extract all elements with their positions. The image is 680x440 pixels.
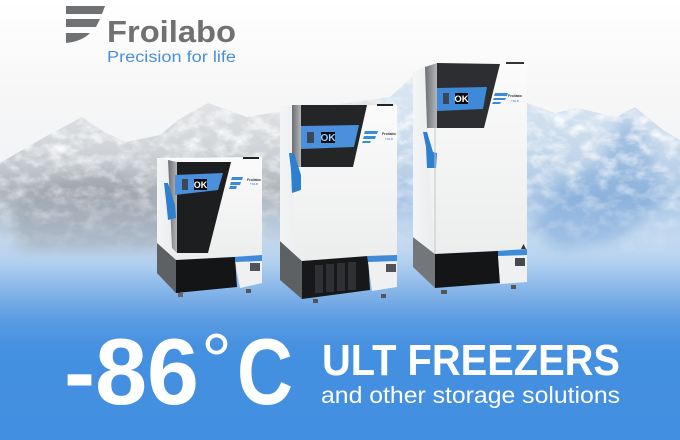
product subheading: and other storage solutions xyxy=(321,382,620,408)
freezer: small model: TMLB xyxy=(250,182,258,186)
temperature headline: -86 xyxy=(64,319,199,424)
logo: Froilabo xyxy=(66,6,236,66)
temperature headline xyxy=(64,318,293,424)
freezer: large model: OK xyxy=(454,94,469,105)
freezer: medium model: Froilabo xyxy=(382,132,396,136)
product heading: ULT FREEZERS xyxy=(322,336,620,385)
freezer: small model: Froilabo xyxy=(247,178,261,182)
freezer: small model xyxy=(157,157,262,297)
temperature headline: C xyxy=(237,319,293,424)
icon: logo stripes xyxy=(66,6,105,43)
freezer: medium model xyxy=(280,104,397,303)
freezer: large model: Froilabo xyxy=(508,94,522,98)
freezer: large model: TMLB xyxy=(511,99,519,103)
logo tagline: Precision for life xyxy=(107,49,236,66)
freezer: small model: OK xyxy=(194,180,208,190)
freezer: medium model: TMLB xyxy=(385,137,393,141)
logo wordmark: Froilabo xyxy=(107,14,236,49)
temperature headline: ° xyxy=(201,318,232,402)
freezer: medium model: OK xyxy=(320,133,336,144)
mountain range background xyxy=(0,77,680,256)
freezer: large model xyxy=(413,62,527,294)
